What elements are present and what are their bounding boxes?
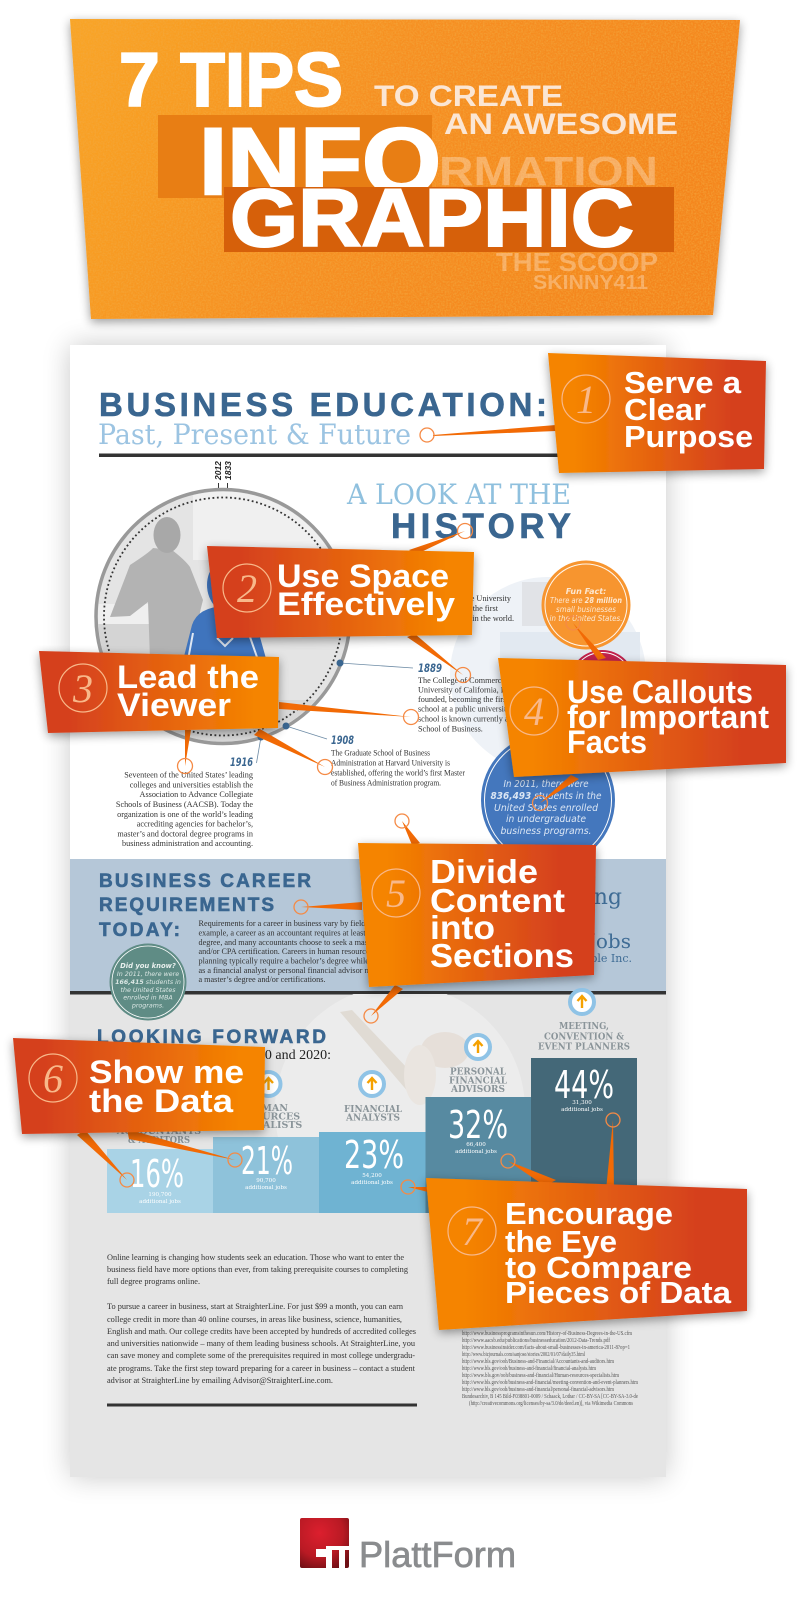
timeline 1916: Schools of Business (AACSB). Today the [116,800,253,809]
bar: human resources 21% [213,1137,319,1213]
callout 4: use callouts for important facts: for Important [567,699,769,735]
bar: meeting planners 44%: 44% [554,1063,614,1107]
label: accountants [116,1126,201,1146]
did you know circle: programs. [131,1002,164,1010]
did you know circle: the United States [121,986,176,994]
timeline 1916: Association to Advance Collegiate [140,790,253,799]
callout 7: encourage the eye: 7 [462,1209,484,1254]
bar: human resources 21%: 21% [241,1139,293,1183]
timeline 1889: 1889 [418,661,442,675]
timeline 1916: 1916 [230,755,253,769]
timeline 1908: Administration at Harvard University is [331,758,450,768]
label: personal advisors: PERSONAL [450,1066,506,1078]
logo: plattform: PlattForm [359,1534,516,1575]
closing text: full degree programs online. [107,1277,200,1286]
right subtext: ble Inc. [590,952,632,965]
title: the scoop: THE SCOOP [496,247,658,277]
callout circle: students: United States enrolled [494,803,599,814]
callout 5: divide content into sections: Sections [430,937,574,974]
bar: financial analysts 23% [319,1132,426,1213]
callout circle: fun fact: small businesses [556,605,616,614]
callout 5: divide content into sections: Divide [430,853,538,890]
heading: business education: BUSINESS EDUCATION: [99,386,547,423]
callout 4: use callouts for important facts: 4 [524,689,544,734]
label: financial analysts: FINANCIAL [344,1104,402,1115]
text: 1833 partial: l in the world. [468,614,514,623]
closing text: can save money and complete some of the prerequisites required in most college undergradu- [107,1351,415,1360]
callout 7: encourage the eye: Encourage [505,1196,673,1231]
source list: http://www.bls.gov/ooh/business-and-financial/financial-analysts.htm [462,1365,596,1372]
timeline 1916: business administration and accounting. [122,839,253,848]
callout 7: encourage the eye: to Compare [505,1250,692,1285]
heading: today: TODAY: [99,920,180,941]
label: accountants: ACCOUNTANTS [116,1126,201,1137]
bar: accountants 16%: additional jobs [139,1199,181,1205]
connector: tip 5 left [294,900,362,914]
icon: arrow financial analysts [360,1072,384,1096]
icon: arrow meeting planners [570,990,594,1014]
timeline 1916: organization is one of the world’s leading [117,810,253,819]
closing text: Online learning is changing how students seek an education. Those who want to enter the [107,1253,404,1262]
heading: requirements: REQUIREMENTS [99,895,274,916]
did you know circle: In 2011, there were [117,970,179,978]
callout circle: fun fact [542,560,630,650]
bar: meeting planners 44% [531,1058,637,1213]
timeline years top: 2012 [213,461,223,481]
did you know circle: enrolled in MBA [123,994,173,1002]
banner box: graphic [224,187,674,252]
logo: plattform [297,1515,520,1575]
bar: accountants 16%: 190,700 [148,1192,172,1198]
closing text: ate programs. Take the first step toward preparing for a career in business – contact a student [107,1364,416,1373]
bar: personal advisors 32% [426,1097,531,1213]
background hand photo [340,994,468,1089]
bar: financial analysts 23%: 54,200 [362,1173,382,1179]
bar: accountants 16% [107,1149,213,1213]
text: 1833 partial [467,594,514,623]
body text: as a financial analyst or personal financial advisor may require [198,966,404,975]
body text: example, a career as an accountant requires at least a bachelor’s [198,928,407,938]
timeline 1908: of Business Administration program. [331,778,441,788]
label: personal advisors: ADVISORS [450,1084,505,1095]
timeline 1889: school is known currently as the Haas [418,714,542,724]
connector: tip 3 down [178,730,192,774]
callout circle: fun fact: in the United States. [550,614,622,623]
timeline 1916: accrediting agencies for bachelor’s, [137,820,253,828]
callout 6: show me the data: the Data [89,1083,233,1119]
source list: Bundesarchiv, B 145 Bild-F038801-0009 / Schaack, Lothar / CC-BY-SA [CC-BY-SA-3.0-de [462,1394,638,1400]
closing text: To pursue a career in business, start at StraighterLine. For just $99 a month, you can earn [107,1302,403,1311]
callout circle: fun fact: There are 28 million [550,596,622,605]
timeline 1889: University of California, Berkeley is [418,686,538,694]
label: meeting planners [538,1021,630,1052]
label: meeting planners: EVENT PLANNERS [538,1042,630,1052]
banner box: info [158,115,432,198]
body text: degree, and many accountants choose to seek a master’s [198,938,382,947]
callout 4: use callouts for important facts: Use Callouts [567,674,753,710]
label: human resources: SPECIALISTS [230,1120,302,1131]
source list: (http://creativecommons.org/licenses/by-sa/3.0/de/deed.en)], via Wikimedia Commons [469,1400,634,1407]
body text: planning typically require a bachelor’s degree while positions [198,956,400,966]
title: info: INFO [199,109,441,215]
bar: meeting planners 44%: 31,300 [572,1100,592,1106]
bar: meeting planners 44%: additional jobs [561,1107,603,1113]
callout circle: students: 836,493 students in the [490,791,602,802]
closing text: advisor at StraighterLine by emailing Advisor@StraighterLine.com. [107,1376,333,1385]
bar: personal advisors 32%: 66,400 [466,1142,486,1148]
timeline 1889 [336,660,542,734]
title: to create: TO CREATE [374,80,563,113]
closing text: business field have more options than ever, from taking prerequisite courses to completing [107,1265,408,1274]
label: human resources: RESOURCES [232,1112,300,1122]
callout 3: lead the viewer: 3 [72,666,93,711]
connector: tip 7 right [606,1113,620,1190]
callout 7: encourage the eye: Pieces of Data [505,1275,732,1310]
body text: Requirements for a career in business vary by field. For [198,919,381,928]
heading: history: HISTORY [391,507,571,546]
body text: a master’s degree and/or certifications. [198,975,325,984]
callout 6: show me the data [13,1038,265,1134]
callout 2: use space effectively: 2 [237,566,257,611]
connector: tip 4 up [566,616,606,660]
callout 1: serve a clear purpose: 1 [576,377,596,422]
callout 6: show me the data: 6 [43,1056,63,1101]
timeline circle photo [96,490,350,745]
source list: http://www.bls.gov/ooh/business-and-financial/personal-financial-advisors.htm [462,1386,614,1393]
right heading fragment: ing [587,885,622,910]
label: human resources [230,1103,302,1131]
bar: personal advisors 32%: additional jobs [455,1149,497,1155]
source list: http://www.bls.gov/ooh/business-and-financial/meeting-convention-and-event-planners.htm [462,1379,638,1386]
bar: human resources 21%: additional jobs [245,1185,287,1191]
label: meeting planners: CONVENTION & [544,1032,624,1042]
source list: http://www.aacsb.edu/publications/businesseducation/2012-Data-Trends.pdf [462,1337,610,1344]
timeline 1908: 1908 [331,733,354,747]
callout 5: divide content into sections: into [430,909,495,946]
callout 6: show me the data: Show me [89,1054,244,1090]
connector: tip 1 [420,425,556,442]
title: an awesome: AN AWESOME [444,108,678,141]
subheading fragment: 10 and 2020: [258,1048,331,1063]
did you know circle [110,944,186,1020]
callout 5: divide content into sections: Content [430,882,565,919]
timeline 1889: school at a public university. The [418,704,527,714]
connector: tip 6 right [127,1129,242,1167]
callout 2: use space effectively: Use Space [277,558,449,594]
callout circle: students: in undergraduate [506,814,586,825]
source list: http://www.bizjournals.com/sanjose/stories/2002/01/07/daily35.html [462,1352,585,1358]
connector: tip 6 left [77,1130,134,1187]
title: graphic: GRAPHIC [230,173,634,264]
timeline 1916: master’s and doctoral degree programs in [117,830,253,838]
source list: http://www.businessprogramsinthesun.com/History-of-Business-Degrees-in-the-US.cfm [462,1330,632,1337]
panel: looking forward section [70,944,666,1477]
callout 7: encourage the eye [426,1178,747,1330]
connector: tip 4 down [532,775,579,810]
icon: arrow human resources [256,1072,280,1096]
right heading: jobs: Jobs [586,929,631,953]
timeline 1908: The Graduate School of Business [331,748,430,758]
bar: financial analysts 23%: 23% [344,1133,404,1177]
bar: accountants 16%: 16% [130,1152,184,1196]
light photo circle [450,577,646,773]
label: financial analysts [344,1104,402,1124]
timeline 1908: established, offering the world’s first Master [331,768,465,778]
timeline 1916: colleges and universities establish the [130,780,253,790]
text: 1833 partial: he University [467,594,512,603]
callout 2: use space effectively: Effectively [277,586,455,622]
connector: tip 7 middle [501,1154,556,1186]
icon: arrow personal advisors [466,1035,490,1059]
timeline 1889: School of Business. [418,724,483,734]
callout 4: use callouts for important facts [498,658,786,777]
body text: and/or CPA certification. Careers in human resources and meeting [198,947,415,956]
connector: tip 2 up [409,524,472,554]
panel: page background [70,345,666,1477]
text: 1833 partial: the first [473,604,499,613]
source list: http://www.bls.gov/ooh/Business-and-Financial/Accountants-and-auditors.htm [462,1359,614,1365]
title: 7 tips: 7 TIPS [119,38,343,123]
callout 1: serve a clear purpose [548,353,766,473]
label: human resources: HUMAN [244,1103,288,1114]
timeline 1916 [116,734,264,848]
source list [462,1330,638,1407]
banner [70,19,740,319]
heading: business career: BUSINESS CAREER [99,871,311,892]
label: financial analysts: ANALYSTS [345,1112,400,1124]
panel: white history section [96,386,646,867]
did you know circle: Did you know? [120,962,176,970]
did you know circle: 166,415 students in [115,978,181,986]
connector: tip 7 left [401,1180,428,1194]
callout circle: fun fact: Fun Fact: [566,587,606,596]
callout 3: lead the viewer: Viewer [117,687,231,723]
callout circle: students [481,733,615,867]
panel: career requirements section [70,859,666,992]
closing text: college credit in more than 40 online courses, in areas like business, science, humanities, [107,1315,402,1324]
callout 7: encourage the eye: the Eye [505,1224,617,1259]
timeline years top: 1833 [223,461,233,480]
title: skinny411: SKINNY411 [533,272,648,294]
callout 4: use callouts for important facts: Facts [567,724,647,760]
timeline 1889: The College of Commerce at the [418,676,525,685]
bar: human resources 21%: 90,700 [256,1178,276,1184]
callout 1: serve a clear purpose: Clear [624,392,706,427]
timeline 1916: Seventeen of the United States’ leading [124,770,253,780]
connector: tip 3 right [279,702,418,724]
closing text: English and math. Our college credits have been accepted by hundreds of accredited colleges [107,1327,416,1336]
timeline years top [213,461,233,494]
subheading: past present future: Past, Present & Future [98,418,411,451]
callout circle: students: business programs. [500,826,592,837]
bar: financial analysts 23%: additional jobs [351,1180,393,1186]
connector: tip 5 top [395,814,420,845]
callout circle: students: In 2011, there were [504,779,588,790]
closing text [107,1253,416,1385]
label: personal advisors [449,1066,507,1095]
source list: http://www.businessinsider.com/facts-about-small-businesses-in-america-2011-8?op=1 [462,1344,630,1351]
heading: looking forward: LOOKING FORWARD [97,1027,326,1048]
body text [198,919,415,984]
bar: personal advisors 32%: 32% [448,1103,508,1147]
connector: tip 5 bottom [364,985,403,1023]
callout 1: serve a clear purpose: Serve a [624,365,742,400]
callout circle: red [569,650,635,716]
callout 2: use space effectively [207,546,474,638]
source list: http://www.bls.gov/ooh/business-and-financial/Human-resources-specialists.htm [462,1372,619,1379]
timeline 1889: founded, becoming the first business [418,695,538,704]
title: rmation: RMATION [439,148,658,194]
callout 1: serve a clear purpose: Purpose [624,419,753,454]
callout 5: divide content into sections [358,843,596,987]
callout 3: lead the viewer [39,651,279,733]
connector: tip 2 down [407,634,470,682]
label: accountants: & AUDITORS [128,1135,190,1146]
callout 3: lead the viewer: Lead the [117,659,259,695]
connector: tip 3 diagonal [254,729,332,774]
heading: a look at the: A LOOK AT THE [346,478,571,511]
closing text: and universities nationwide – many of them leading business schools. At StraighterLine, you [107,1339,415,1348]
label: meeting planners: MEETING, [559,1021,609,1032]
label: personal advisors: FINANCIAL [449,1076,507,1086]
timeline 1908 [282,722,465,788]
callout 5: divide content into sections: 5 [386,871,406,916]
